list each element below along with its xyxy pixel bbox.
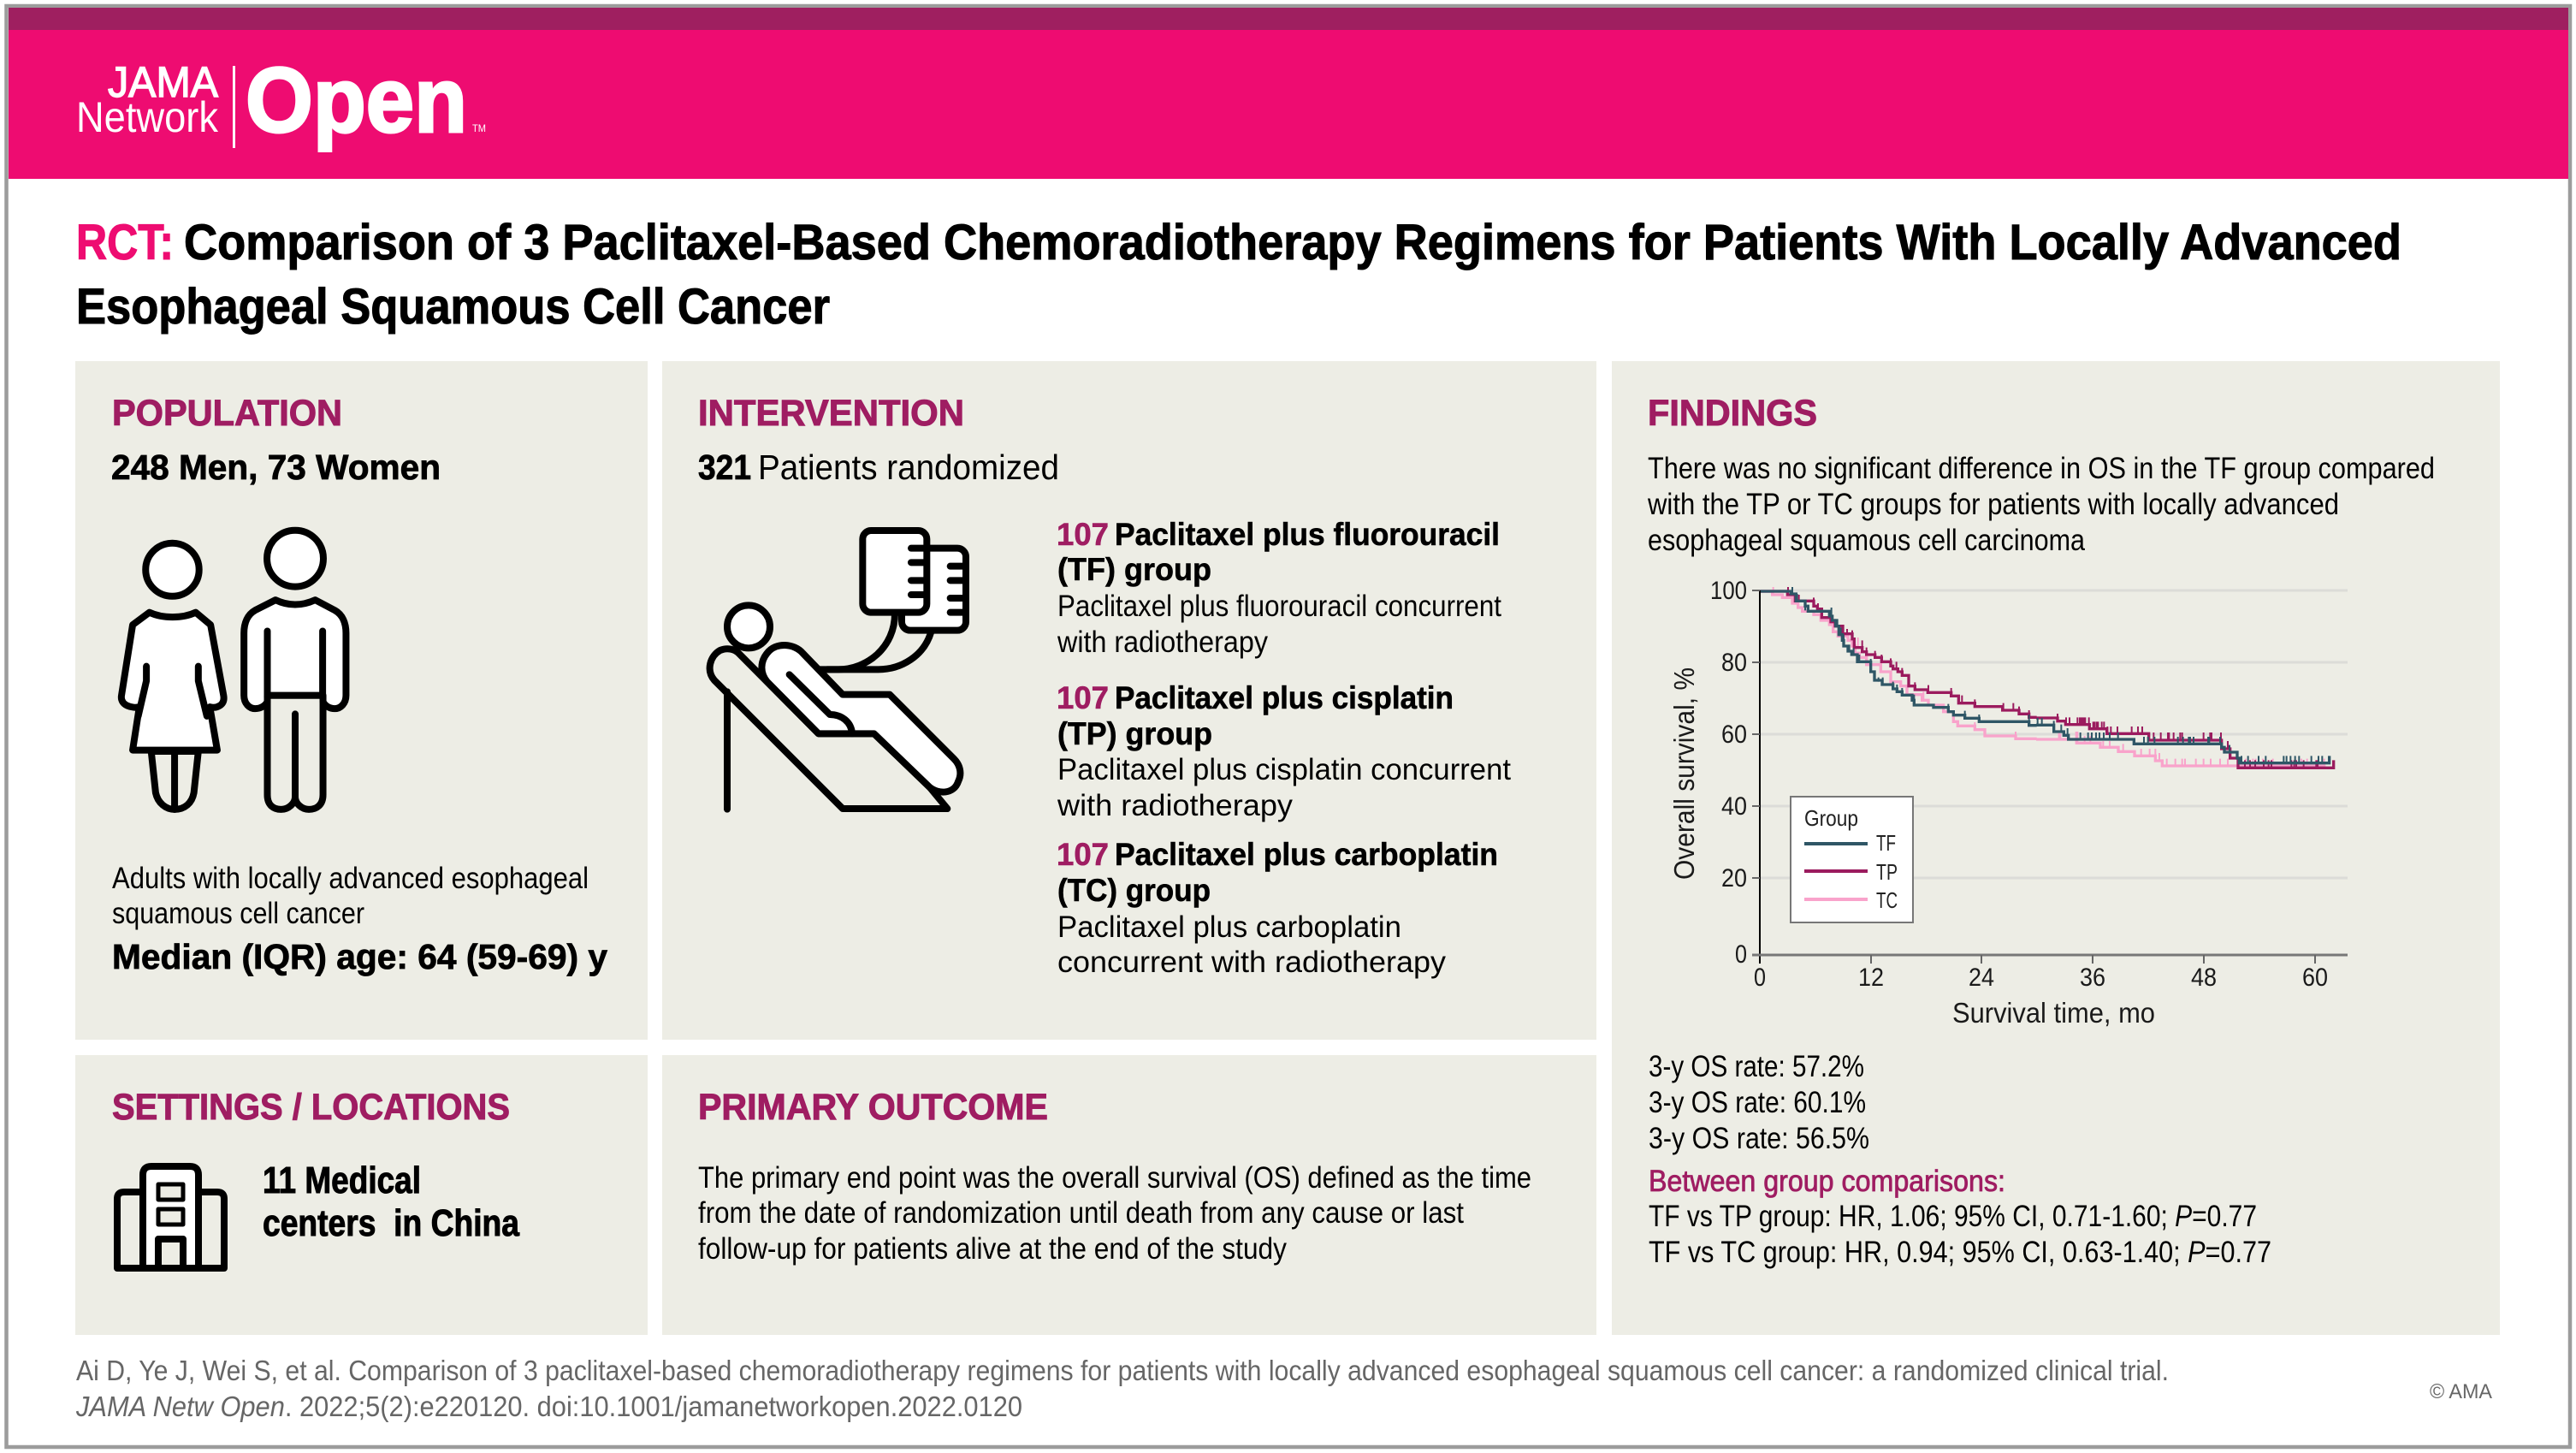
arm: TP group: Paclitaxel plus cisplatin — [1115, 680, 1454, 715]
survival curve: TF — [1760, 587, 2330, 763]
randomized count: 321 — [698, 448, 751, 487]
y axis tick labels: 100 — [1710, 577, 1747, 605]
between group comparisons: TF vs TP group: HR, 1.06; 95% CI, 0.71-1.60; P=0.77 — [1649, 1200, 2257, 1233]
x axis tick labels: 60 — [2302, 964, 2328, 992]
OS rates: 3-y OS rate: 57.2% — [1649, 1050, 1864, 1083]
survival curve: TC — [1760, 587, 2325, 766]
x axis tick labels: 48 — [2191, 964, 2217, 992]
heading: findings: FINDINGS — [1648, 393, 1817, 434]
arm: TF group — [1057, 517, 1501, 659]
logo: JAMA Network Open: Network — [76, 93, 219, 141]
population description: squamous cell cancer — [112, 897, 364, 930]
y axis tick labels: 60 — [1721, 721, 1747, 749]
settings text: 11 Medical — [263, 1159, 421, 1201]
between group comparisons — [1649, 1165, 2271, 1269]
legend — [1791, 797, 1913, 922]
citation — [75, 1355, 2169, 1422]
y axis title: Overall survival, % — [1668, 667, 1700, 880]
arm: TP group: 107 — [1057, 680, 1109, 715]
arm: TF group: Paclitaxel plus fluorouracil concurrent — [1057, 590, 1501, 623]
findings summary — [1647, 452, 2435, 557]
panel: settings and locations — [75, 1055, 648, 1335]
y axis tick labels: 0 — [1735, 940, 1747, 969]
settings text — [263, 1159, 519, 1244]
y axis tick labels: 40 — [1721, 792, 1747, 821]
median age: Median (IQR) age: 64 (59-69) y — [112, 937, 607, 976]
arm: TP group: (TP) group — [1057, 716, 1212, 751]
OS rates — [1649, 1050, 1869, 1155]
findings summary: with the TP or TC groups for patients with locally advanced — [1647, 488, 2339, 521]
panel: population — [75, 361, 648, 1040]
panel: findings — [1612, 361, 2500, 1335]
copyright: © AMA — [2430, 1380, 2492, 1403]
arm: TF group: 107 — [1057, 517, 1109, 552]
logo: JAMA Network Open: Open — [246, 48, 467, 151]
arm: TC group: Paclitaxel plus carboplatin — [1057, 910, 1401, 944]
arm: TC group — [1057, 837, 1498, 979]
logo: JAMA Network Open — [76, 48, 486, 151]
arm: TC group: concurrent with radiotherapy — [1057, 946, 1447, 979]
arm: TP group: with radiotherapy — [1057, 789, 1294, 822]
OS rates: 3-y OS rate: 60.1% — [1649, 1086, 1866, 1119]
arm: TF group: (TF) group — [1057, 552, 1211, 587]
title: Esophageal Squamous Cell Cancer — [76, 279, 830, 335]
x axis tick labels: 24 — [1969, 964, 1994, 992]
arm: TF group: Paclitaxel plus fluorouracil — [1115, 517, 1500, 552]
findings summary: esophageal squamous cell carcinoma — [1648, 524, 2085, 557]
legend: TP — [1876, 859, 1898, 885]
panel: intervention — [662, 361, 1596, 1040]
x axis tick labels — [1754, 964, 2328, 992]
logo: JAMA Network Open: JAMA — [108, 58, 219, 106]
arm: TC group: (TC) group — [1057, 873, 1211, 908]
between group comparisons: TF vs TC group: HR, 0.94; 95% CI, 0.63-1.40; P=0.77 — [1649, 1236, 2271, 1269]
between group comparisons: Between group comparisons: — [1649, 1165, 2005, 1198]
population counts: 248 Men, 73 Women — [111, 448, 441, 487]
randomized count: Patients randomized — [758, 448, 1059, 487]
logo: JAMA Network Open: TM — [472, 122, 486, 134]
legend: TC — [1876, 887, 1898, 913]
legend: TF — [1876, 830, 1896, 856]
heading: intervention: INTERVENTION — [698, 393, 964, 434]
icon: woman and man — [121, 531, 346, 810]
findings summary: There was no significant difference in OS in the TF group compared — [1648, 452, 2435, 485]
arm: TP group: Paclitaxel plus cisplatin concurrent — [1057, 753, 1511, 786]
heading: primary outcome: PRIMARY OUTCOME — [698, 1087, 1048, 1128]
y axis tick labels — [1710, 577, 1747, 969]
chart: Kaplan-Meier overall survival — [1668, 577, 2348, 1029]
y axis tick labels: 80 — [1721, 649, 1747, 677]
title: RCT: — [76, 215, 174, 270]
header banner — [9, 8, 2568, 179]
x axis tick labels: 36 — [2080, 964, 2105, 992]
arm: TC group: Paclitaxel plus carboplatin — [1115, 837, 1498, 872]
title — [76, 215, 2401, 335]
legend: Group — [1804, 805, 1858, 831]
icon: hospital building — [117, 1166, 224, 1268]
primary outcome text — [698, 1161, 1531, 1266]
arm: TF group: with radiotherapy — [1057, 626, 1268, 659]
x axis tick labels: 0 — [1754, 964, 1766, 992]
y axis tick labels: 20 — [1721, 864, 1747, 893]
panel: primary outcome — [662, 1055, 1596, 1335]
x axis title: Survival time, mo — [1952, 997, 2155, 1029]
citation: JAMA Netw Open. 2022;5(2):e220120. doi:10.1001/jamanetworkopen.2022.0120 — [75, 1391, 1022, 1422]
title: Comparison of 3 Paclitaxel-Based Chemoradiotherapy Regimens for Patients With Locally Advanced — [184, 215, 2401, 270]
primary outcome text: The primary end point was the overall survival (OS) defined as the time — [698, 1161, 1531, 1195]
primary outcome text: follow-up for patients alive at the end of the study — [698, 1232, 1287, 1266]
arm: TC group: 107 — [1057, 837, 1109, 872]
arm: TP group — [1057, 680, 1511, 822]
primary outcome text: from the date of randomization until death from any cause or last — [698, 1196, 1464, 1230]
axes — [1752, 590, 2348, 964]
population description — [112, 862, 589, 930]
x axis tick labels: 12 — [1858, 964, 1884, 992]
icon: patient in infusion chair — [710, 531, 966, 810]
heading: settings: SETTINGS / LOCATIONS — [112, 1087, 510, 1128]
heading: population: POPULATION — [112, 393, 342, 434]
settings text: centers in China — [263, 1202, 519, 1244]
survival curve: TP — [1760, 587, 2334, 768]
citation: Ai D, Ye J, Wei S, et al. Comparison of 3 paclitaxel-based chemoradiotherapy regimens for patients with locally advanced esophageal squamous cell cancer: a randomized clinical trial. — [76, 1355, 2169, 1386]
population description: Adults with locally advanced esophageal — [112, 862, 589, 895]
OS rates: 3-y OS rate: 56.5% — [1649, 1122, 1869, 1155]
